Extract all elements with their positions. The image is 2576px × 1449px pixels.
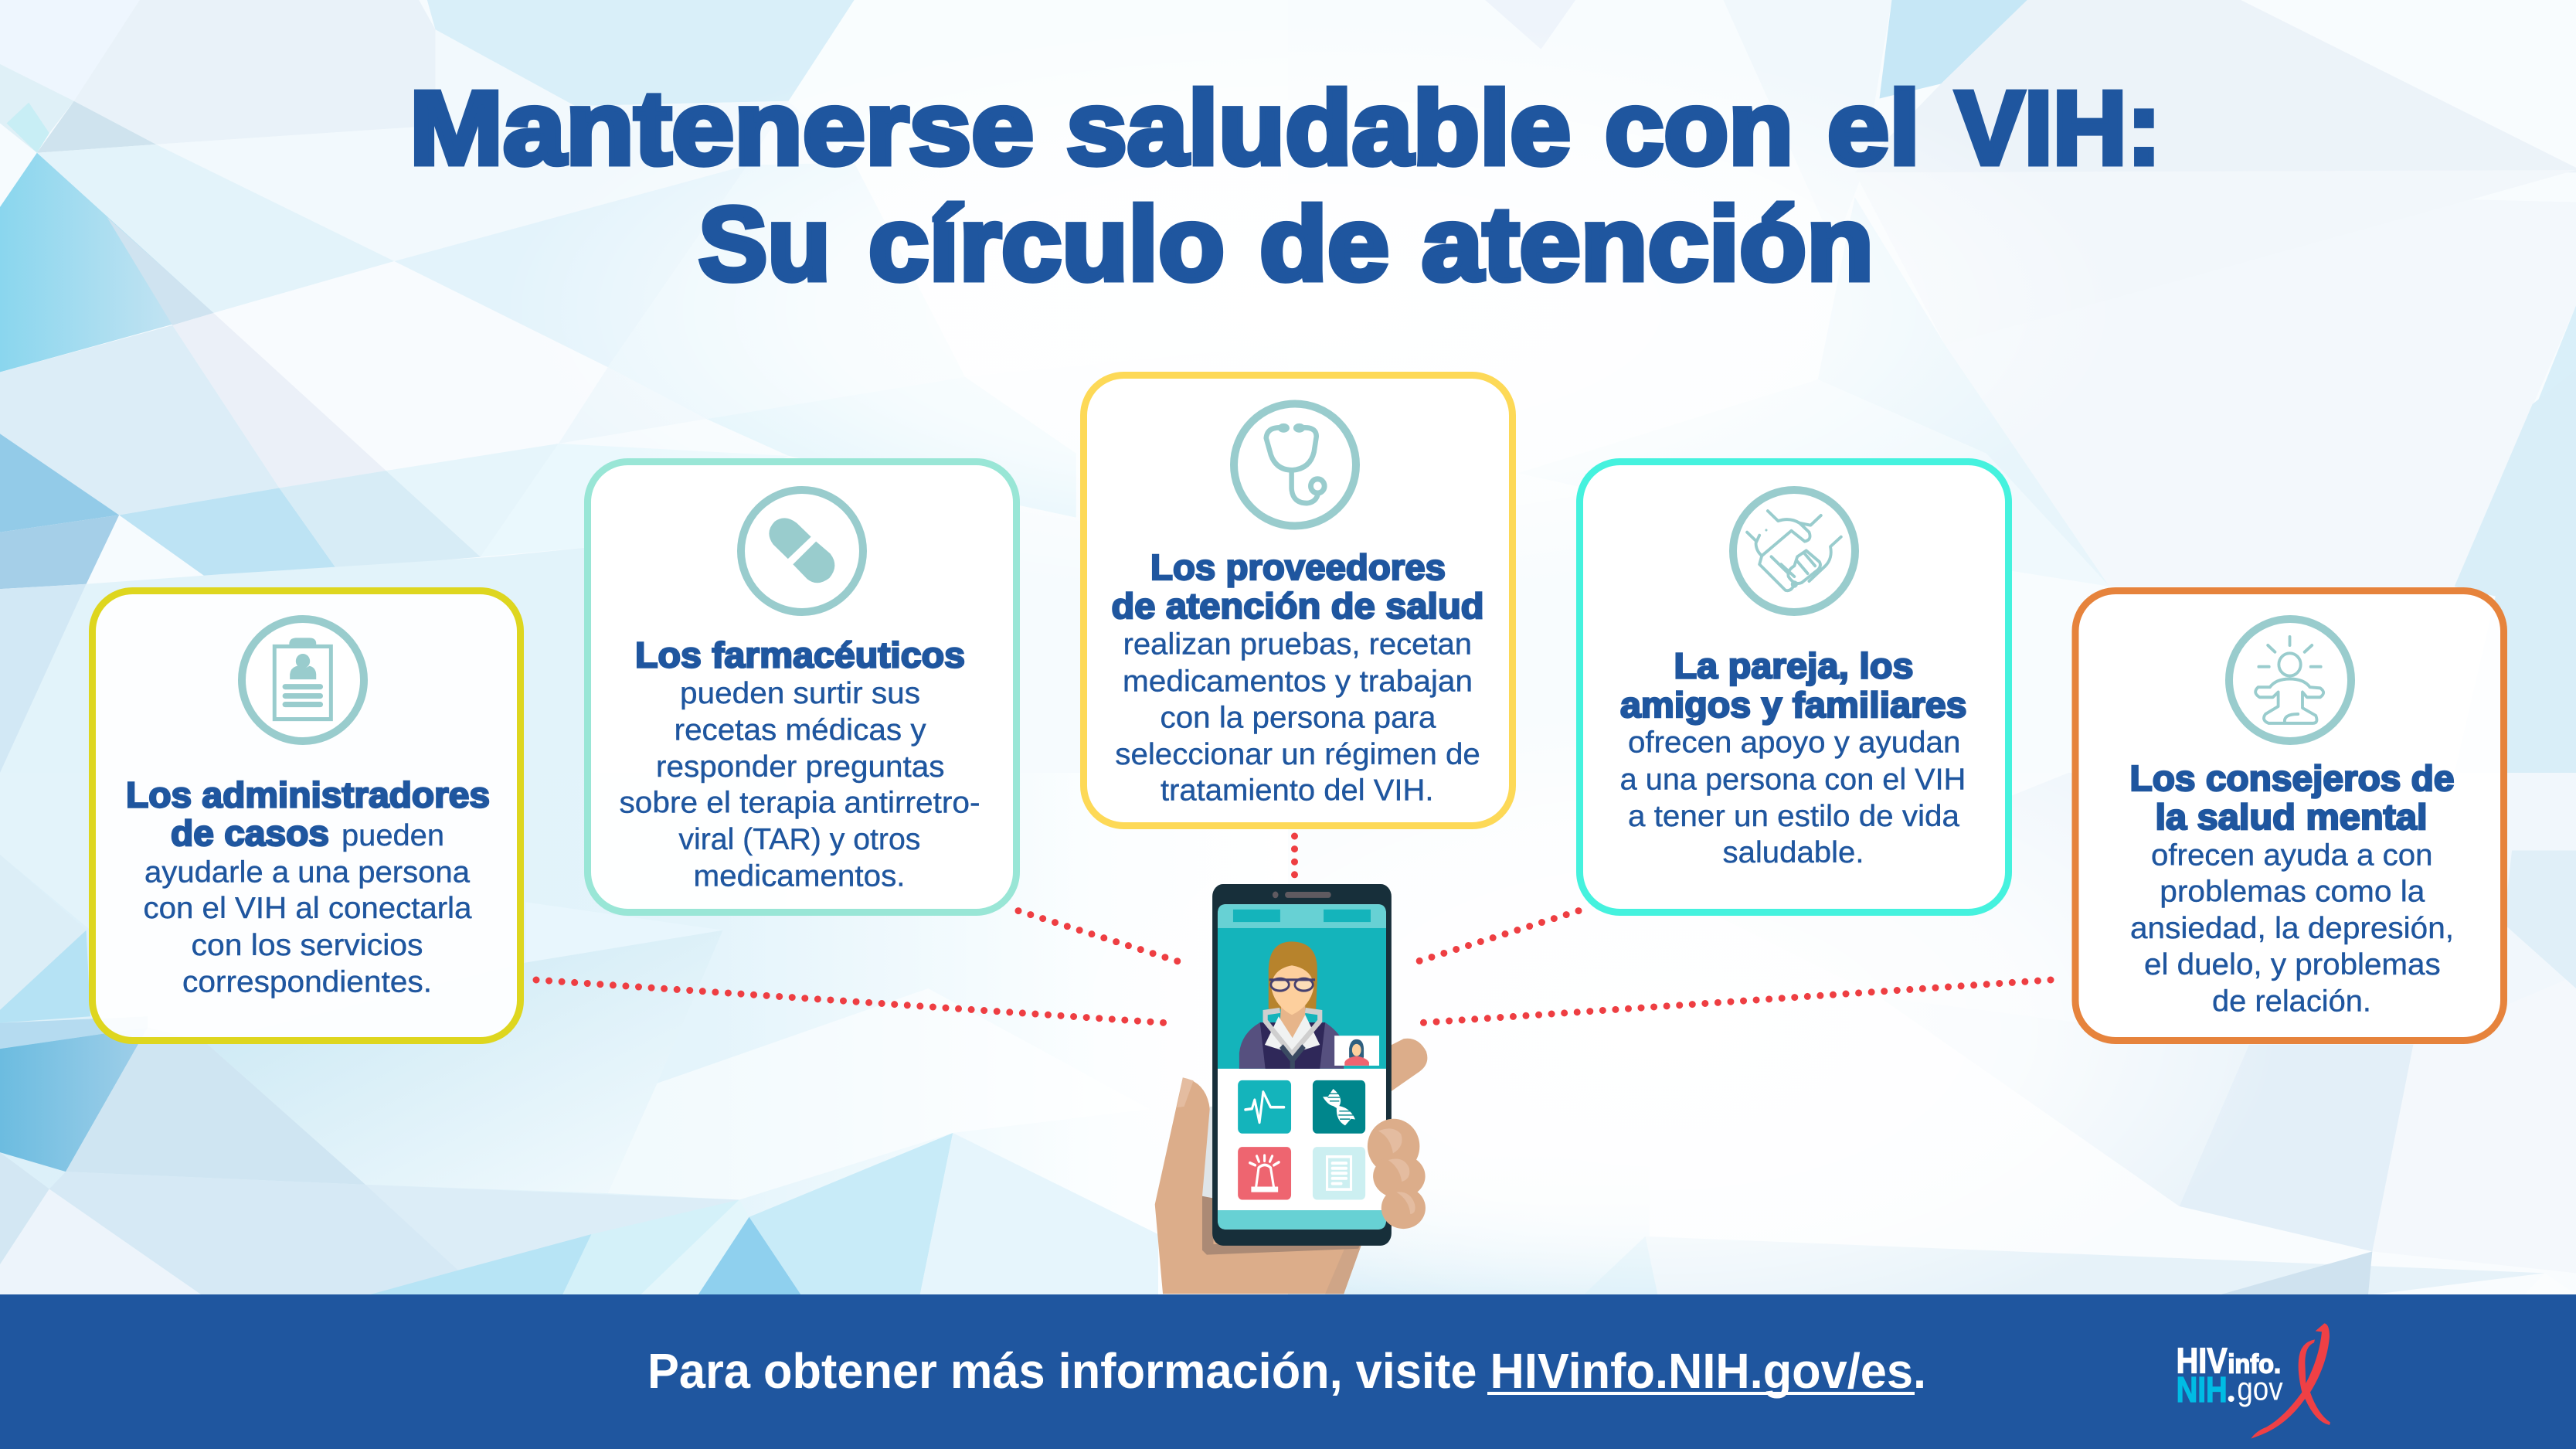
- text: partner, friends and family: ofrecen apoyo y ayudan: [1628, 726, 1960, 759]
- text: pharmacists: [620, 635, 980, 893]
- icon: handshake: [1733, 490, 1855, 612]
- footer band: [0, 1294, 2576, 1449]
- panel: case managers: [93, 590, 521, 1040]
- title: círculo: [868, 185, 1225, 302]
- text: partner, friends and family: a una persona con el VIH: [1620, 764, 1966, 797]
- title: Mantenerse: [410, 70, 1034, 186]
- text: case managers: ayudarle a una persona: [144, 855, 470, 889]
- title: saludable: [1066, 70, 1571, 186]
- text: pharmacists: pueden surtir sus: [680, 677, 920, 710]
- text: health care providers: con la persona para: [1161, 701, 1436, 734]
- panel: partner, friends and family: [1579, 462, 2009, 912]
- text: partner, friends and family: amigos y familiares: [1620, 685, 1967, 725]
- text: case managers: con los servicios: [192, 929, 423, 962]
- title: con: [1605, 70, 1793, 186]
- app tile: document: [1313, 1147, 1365, 1200]
- icon: meditating person: [2229, 619, 2351, 741]
- title: Su: [698, 185, 831, 302]
- icon: clipboard with person: [242, 619, 364, 741]
- title: [410, 70, 2161, 302]
- text: case managers: correspondientes.: [182, 966, 432, 999]
- video call: patient inset: [1334, 1036, 1379, 1066]
- text: mental health counselors: ansiedad, la depresión,: [2130, 912, 2454, 945]
- app tile: heartbeat: [1238, 1080, 1291, 1134]
- text: pharmacists: sobre el terapia antirretro-: [620, 787, 980, 820]
- panel: health care providers: [1083, 376, 1513, 825]
- text: mental health counselors: [2129, 758, 2454, 1018]
- app tile: alarm: [1238, 1147, 1291, 1200]
- icon: stethoscope: [1234, 403, 1356, 526]
- logo: HIVinfo.NIH.gov with red ribbon: [2177, 1323, 2330, 1439]
- text: partner, friends and family: a tener un estilo de vida: [1628, 800, 1959, 833]
- icon: pill capsule: [741, 490, 863, 612]
- text: partner, friends and family: saludable.: [1723, 836, 1864, 869]
- hand: fingers: [1368, 1119, 1426, 1229]
- logo: HIVinfo.NIH.gov with red ribbon: HIV: [2177, 1341, 2228, 1381]
- text: mental health counselors: la salud mental: [2156, 797, 2428, 837]
- panel: pharmacists: [587, 462, 1017, 912]
- logo: HIVinfo.NIH.gov with red ribbon: info.: [2228, 1350, 2281, 1379]
- text: pharmacists: responder preguntas: [656, 750, 944, 784]
- video call: doctor: [1239, 941, 1344, 1069]
- text: mental health counselors: ofrecen ayuda a con: [2151, 839, 2432, 872]
- text: mental health counselors: problemas como la: [2160, 875, 2425, 908]
- text: health care providers: Los proveedores: [1150, 547, 1446, 587]
- text: health care providers: [1111, 547, 1483, 807]
- text: case managers: Los administradores: [126, 774, 490, 815]
- text: mental health counselors: el duelo, y problemas: [2144, 948, 2441, 981]
- title: VIH:: [1956, 70, 2161, 186]
- text: case managers: pueden: [342, 819, 444, 852]
- text: health care providers: de atención de salud: [1111, 586, 1483, 626]
- title: de: [1259, 185, 1389, 302]
- dotted connector lines: [536, 836, 2051, 1023]
- text: case managers: de casos: [171, 813, 329, 853]
- app tile: DNA: [1313, 1080, 1365, 1134]
- text: health care providers: tratamiento del VIH.: [1161, 774, 1434, 807]
- text: case managers: con el VIH al conectarla: [144, 892, 472, 925]
- text: mental health counselors: de relación.: [2212, 985, 2371, 1018]
- phone held in hand: [1154, 884, 1428, 1294]
- text: health care providers: medicamentos y trabajan: [1123, 665, 1473, 698]
- text: pharmacists: viral (TAR) y otros: [678, 823, 920, 856]
- text: pharmacists: medicamentos.: [694, 860, 906, 893]
- text: case managers: [126, 774, 490, 999]
- text: pharmacists: recetas médicas y: [675, 714, 926, 747]
- text: health care providers: realizan pruebas, recetan: [1123, 628, 1472, 661]
- logo: HIVinfo.NIH.gov with red ribbon: NIH: [2177, 1369, 2228, 1410]
- panel: mental health counselors: [2075, 590, 2503, 1040]
- title: atención: [1422, 185, 1874, 302]
- text: health care providers: seleccionar un régimen de: [1115, 738, 1480, 771]
- text: partner, friends and family: [1620, 645, 1967, 869]
- footer text with link: Para obtener más información, visite HIVinfo.NIH.gov/es.: [647, 1343, 1926, 1399]
- text: partner, friends and family: La pareja, los: [1674, 645, 1913, 685]
- hand: palm and thumb: [1155, 1039, 1427, 1294]
- text: pharmacists: Los farmacéuticos: [635, 635, 965, 675]
- title: el: [1827, 70, 1920, 186]
- logo: HIVinfo.NIH.gov with red ribbon: gov: [2237, 1371, 2283, 1408]
- phone body: [1212, 884, 1392, 1246]
- text: mental health counselors: Los consejeros de: [2129, 758, 2454, 798]
